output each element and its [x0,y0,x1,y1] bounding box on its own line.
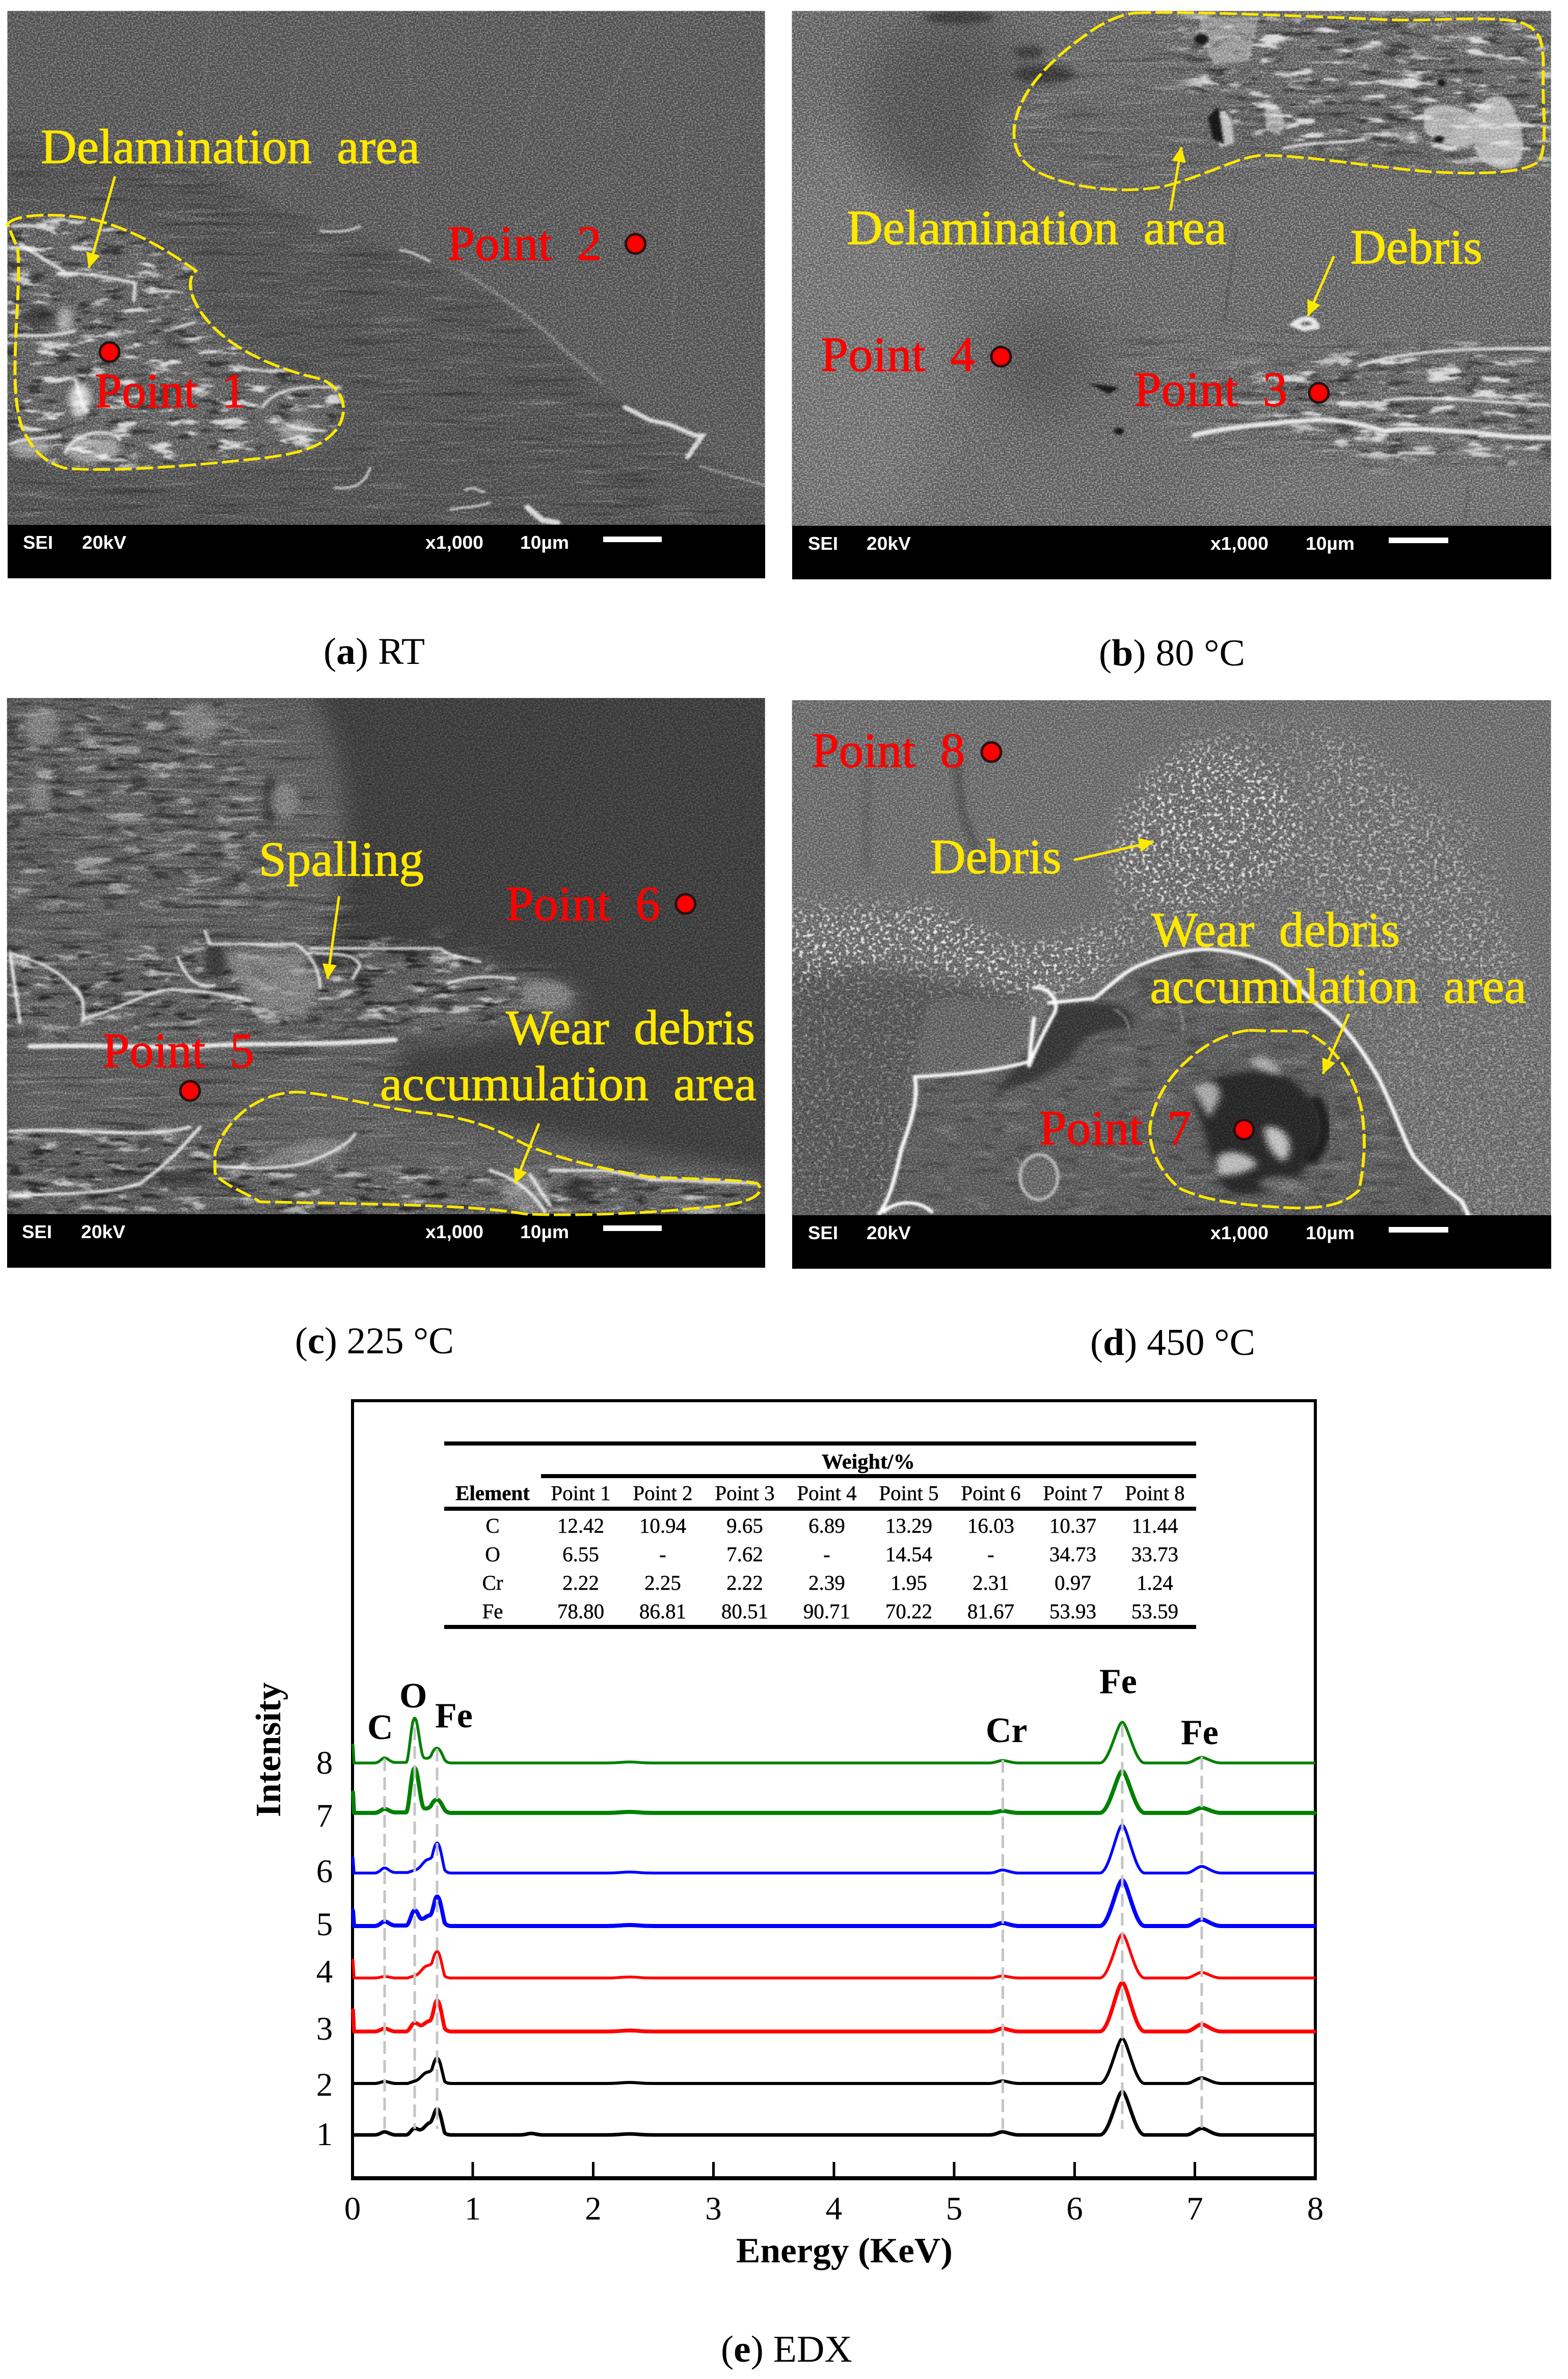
spectrum number labels: 5 [316,1906,333,1943]
wear debris label c [380,1000,756,1111]
info bar d: 20kV [867,1222,911,1243]
spectrum number labels: 2 [316,2067,333,2103]
inset table of weight percent: 33.73 [1131,1542,1178,1566]
info bar b: SEI [808,533,838,554]
info bar a [8,525,765,578]
delamination label a: Delamination area [41,119,420,174]
inset table of weight percent: 14.54 [885,1542,932,1566]
x axis tick labels: 1 [465,2190,481,2227]
inset table of weight percent: - [659,1542,666,1566]
inset table of weight percent: 10.94 [639,1514,686,1537]
info bar b [792,526,1551,579]
inset table of weight percent: 81.67 [967,1599,1014,1623]
inset table of weight percent: 13.29 [885,1514,932,1537]
info bar a: SEI [23,532,53,553]
spectrum 6 [353,1825,1314,1873]
info bar c: x1,000 [425,1221,483,1242]
inset table of weight percent: 10.37 [1049,1514,1096,1537]
point 3 marker: Point 3 [1134,362,1287,417]
SEM image c [0,683,784,1249]
info bar c: 20kV [81,1221,125,1242]
inset table of weight percent: Element [455,1481,530,1505]
caption e: (e) EDX [721,2329,852,2370]
panel d: 450 C SEM micrograph [784,683,1568,1269]
wear debris label c: accumulation area [380,1056,756,1111]
point 2 marker: Point 2 [447,216,602,271]
spectrum number labels: 3 [316,2011,333,2047]
inset table of weight percent: 11.44 [1132,1514,1178,1537]
arrow to wear debris c [515,1124,539,1184]
spectrum number labels [316,1745,333,2153]
inset table of weight percent: Point 5 [879,1481,939,1505]
point 4 marker: Point 4 [821,327,975,382]
element peak labels: Fe [1099,1662,1137,1701]
inset table of weight percent: Point 3 [715,1481,775,1505]
inset table of weight percent: 12.42 [557,1514,604,1537]
inset table of weight percent: Fe [482,1599,503,1623]
x axis tick labels: 7 [1186,2190,1203,2227]
panel e: EDX chart [249,1401,1323,2270]
point 7 marker: Point 7 [1039,1101,1192,1155]
inset table of weight percent: Point 6 [961,1481,1021,1505]
x axis title: Energy (KeV) [736,2231,953,2270]
info bar b: x1,000 [1210,533,1268,554]
spalling label: Spalling [259,832,424,887]
inset table of weight percent: 2.31 [972,1571,1009,1594]
spectrum number labels: 7 [316,1798,333,1834]
inset table of weight percent: O [485,1542,500,1566]
inset table of weight percent: C [485,1514,500,1537]
wear debris label d: accumulation area [1150,959,1526,1013]
inset table of weight percent: 78.80 [557,1599,604,1623]
wear debris label c: Wear debris [506,1000,755,1055]
inset table of weight percent: 1.95 [890,1571,927,1594]
inset table of weight percent: Point 4 [797,1481,857,1505]
inset table of weight percent: 90.71 [803,1599,850,1623]
delamination area outline a [8,215,343,469]
element peak labels: Fe [1181,1713,1219,1752]
inset table of weight percent: Point 8 [1125,1481,1185,1505]
spectrum 7 [353,1768,1314,1813]
arrow a [89,176,115,268]
info bar c [7,1214,765,1268]
panel b: 80 C SEM micrograph [749,0,1568,579]
info bar c: SEI [22,1221,52,1242]
delamination label b: Delamination area [847,200,1227,255]
point 6 marker: Point 6 [506,876,660,931]
inset table of weight percent: 9.65 [726,1514,763,1537]
wear debris label d: Wear debris [1151,902,1400,957]
spectrum 3 [353,1983,1314,2031]
x axis tick labels: 6 [1066,2190,1083,2227]
spectrum number labels: 8 [316,1745,333,1781]
arrow to delamination area b [1171,147,1181,210]
x axis tick labels: 0 [344,2190,361,2227]
inset table of weight percent: 16.03 [967,1514,1014,1537]
y axis title: Intensity [249,1682,288,1817]
info bar d: 10µm [1306,1222,1355,1243]
spectrum 2 [354,2039,1314,2083]
x axis tick labels: 4 [826,2190,842,2227]
x axis tick labels: 2 [585,2190,602,2227]
arrow to spalling [328,896,339,979]
wear debris accumulation outline d [1150,1030,1364,1208]
inset table of weight percent: 2.22 [562,1571,599,1594]
caption d: (d) 450 °C [1090,1322,1255,1364]
spectrum 4 [353,1934,1314,1978]
spectrum 1 [354,2092,1314,2135]
point 8 marker: Point 8 [812,723,965,778]
debris label d: Debris [930,830,1062,884]
inset table of weight percent [444,1441,1196,1629]
inset table of weight percent: 86.81 [639,1599,686,1623]
element peak labels: O [399,1676,427,1716]
inset table of weight percent: 6.55 [562,1542,599,1566]
wear debris accumulation outline c [215,1092,760,1215]
inset table of weight percent: Cr [482,1571,503,1594]
inset table of weight percent: - [823,1542,830,1566]
info bar d [792,1215,1551,1269]
inset table of weight percent: 6.89 [808,1514,845,1537]
inset table of weight percent: 53.59 [1131,1599,1178,1623]
arrow to wear debris d [1323,1014,1349,1074]
inset table of weight percent: Weight/% [822,1450,915,1473]
caption b: (b) 80 °C [1099,632,1245,674]
info bar d: SEI [808,1222,838,1243]
delamination area outline b [1014,13,1544,190]
element peak labels [367,1662,1219,1752]
inset table of weight percent: 0.97 [1055,1571,1091,1594]
spectrum number labels: 6 [316,1853,333,1890]
arrow to debris d [1074,842,1154,860]
x axis tick labels: 3 [705,2190,722,2227]
spectrum number labels: 4 [316,1954,333,1990]
SEM image b [749,0,1568,566]
inset table of weight percent: - [987,1542,994,1566]
peak guide lines [385,1724,1202,2129]
arrow to debris b [1308,256,1334,316]
caption c: (c) 225 °C [295,1320,454,1362]
info bar b: 10µm [1306,533,1355,554]
inset table of weight percent: 2.25 [644,1571,681,1594]
panel c: 225 C SEM micrograph [0,683,784,1268]
info bar a: 20kV [82,532,126,553]
SEM image a [7,11,765,525]
inset table of weight percent: 70.22 [885,1599,932,1623]
wear debris label d [1150,902,1526,1013]
inset table of weight percent: Point 1 [551,1481,611,1505]
inset table of weight percent: 53.93 [1049,1599,1096,1623]
x axis base line and ticks [351,2162,1317,2178]
SEM image d [784,683,1568,1249]
x axis tick labels: 8 [1307,2190,1323,2227]
spectrum 8 [353,1718,1314,1763]
spectrum 5 [353,1880,1314,1926]
debris label b: Debris [1350,220,1482,274]
element peak labels: Fe [435,1696,473,1735]
info bar d: x1,000 [1210,1222,1268,1243]
info bar a: x1,000 [425,532,483,553]
panel a: RT SEM micrograph [0,0,784,578]
x axis tick labels [344,2190,1323,2227]
inset table of weight percent: 2.22 [726,1571,763,1594]
element peak labels: C [367,1708,393,1747]
chart frame [353,1401,1315,2178]
inset table of weight percent: 34.73 [1049,1542,1096,1566]
info bar a: 10µm [520,532,569,553]
inset table of weight percent: 2.39 [808,1571,845,1594]
inset table of weight percent: 7.62 [726,1542,763,1566]
inset table of weight percent: Point 2 [633,1481,693,1505]
inset table of weight percent: 1.24 [1137,1571,1173,1594]
element peak labels: Cr [986,1711,1028,1750]
point 1 marker: Point 1 [95,363,246,418]
x axis tick labels: 5 [946,2190,962,2227]
caption a: (a) RT [323,631,425,673]
inset table of weight percent: Point 7 [1043,1481,1103,1505]
info bar c: 10µm [520,1221,569,1242]
point 5 marker: Point 5 [102,1023,254,1078]
info bar b: 20kV [867,533,911,554]
spectrum number labels: 1 [316,2116,333,2153]
inset table of weight percent: 80.51 [721,1599,768,1623]
